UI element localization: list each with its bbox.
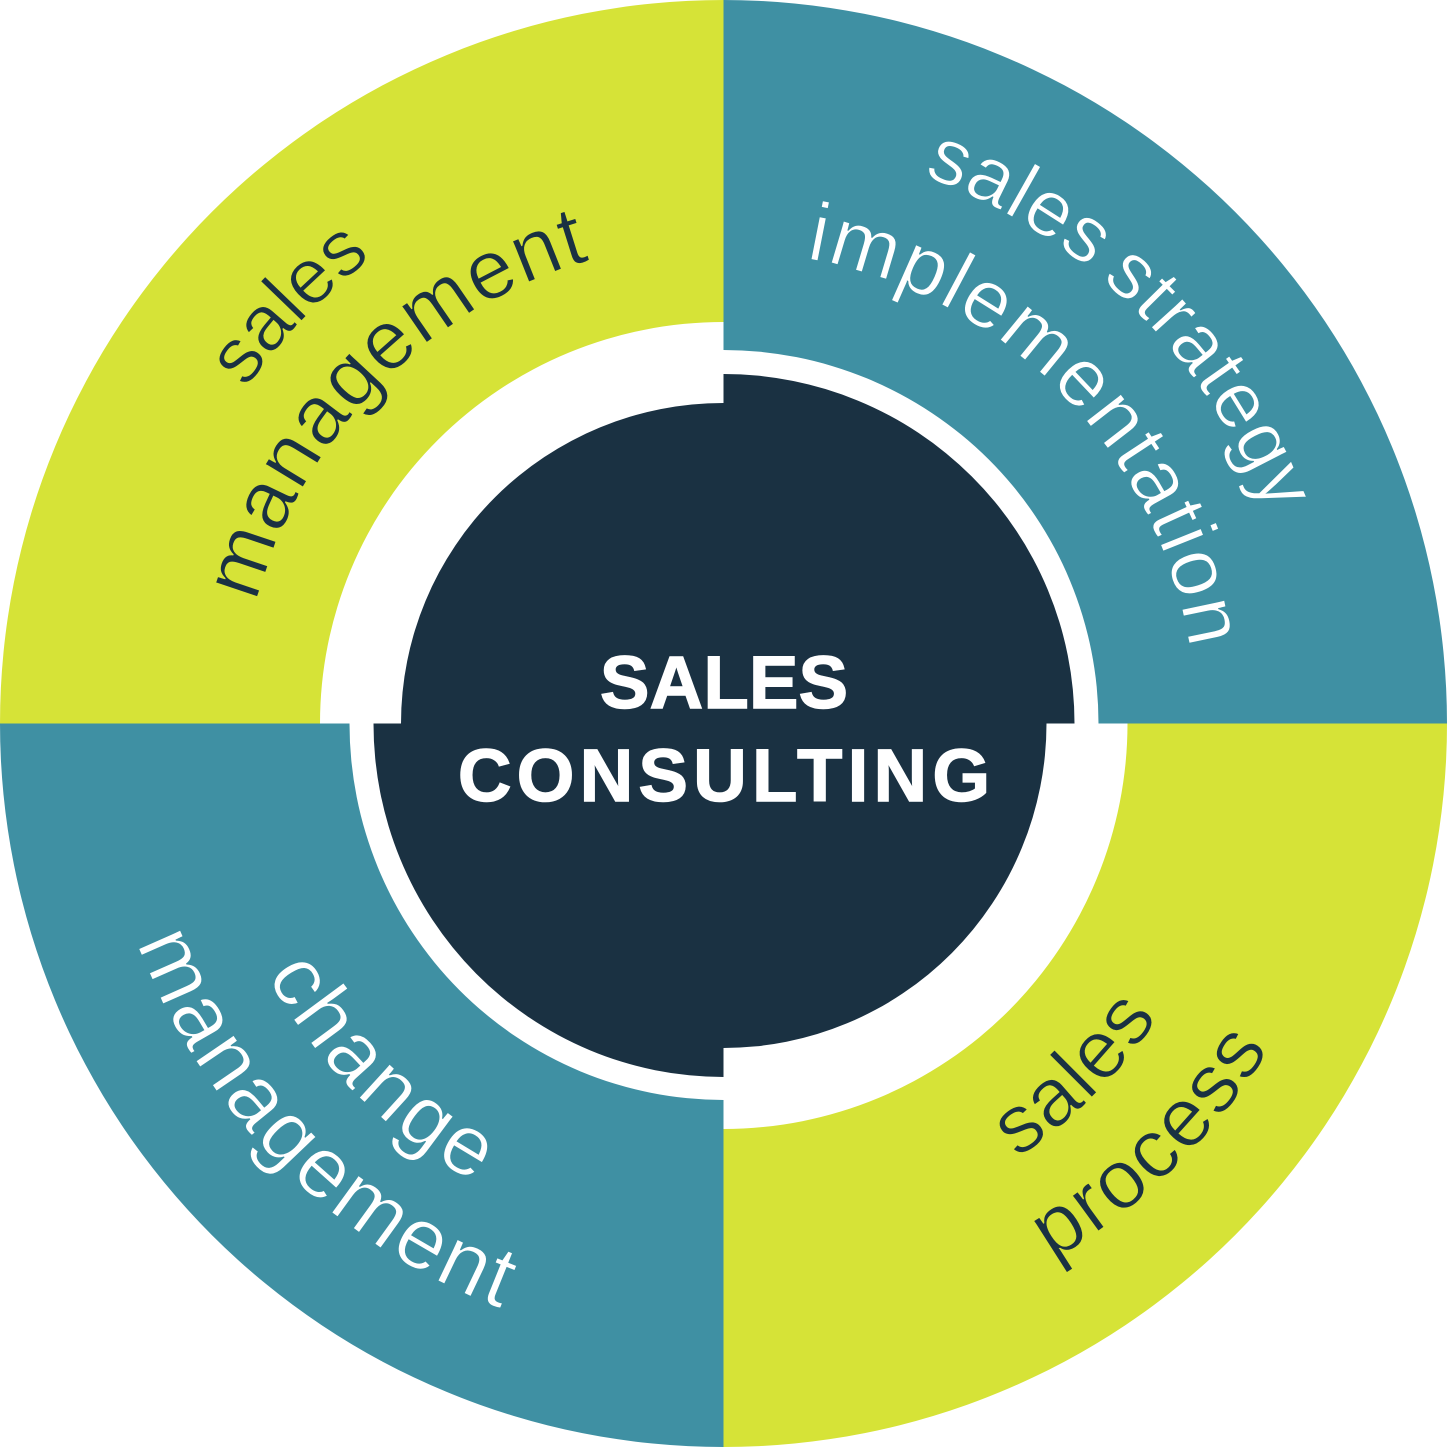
center circle: [374, 374, 1074, 1077]
panel: change management: [0, 724, 724, 1447]
label: sales process: process: [1034, 1033, 1263, 1272]
panel: sales management: [0, 0, 724, 724]
center title: SALES: [600, 641, 848, 724]
label: change management: change: [274, 962, 488, 1175]
panel: sales process: [724, 724, 1447, 1447]
label: change management: management: [139, 930, 516, 1308]
label: sales management: sales: [220, 232, 365, 382]
panel: sales strategy implementation: [724, 0, 1447, 724]
label: sales strategy implementation: sales strategy: [929, 142, 1306, 498]
label: sales process: sales: [1000, 1000, 1152, 1152]
label: sales strategy implementation: implementation: [812, 201, 1230, 643]
center title: CONSULTING: [458, 734, 990, 817]
center title: [458, 641, 990, 817]
label: sales management: management: [216, 212, 589, 596]
